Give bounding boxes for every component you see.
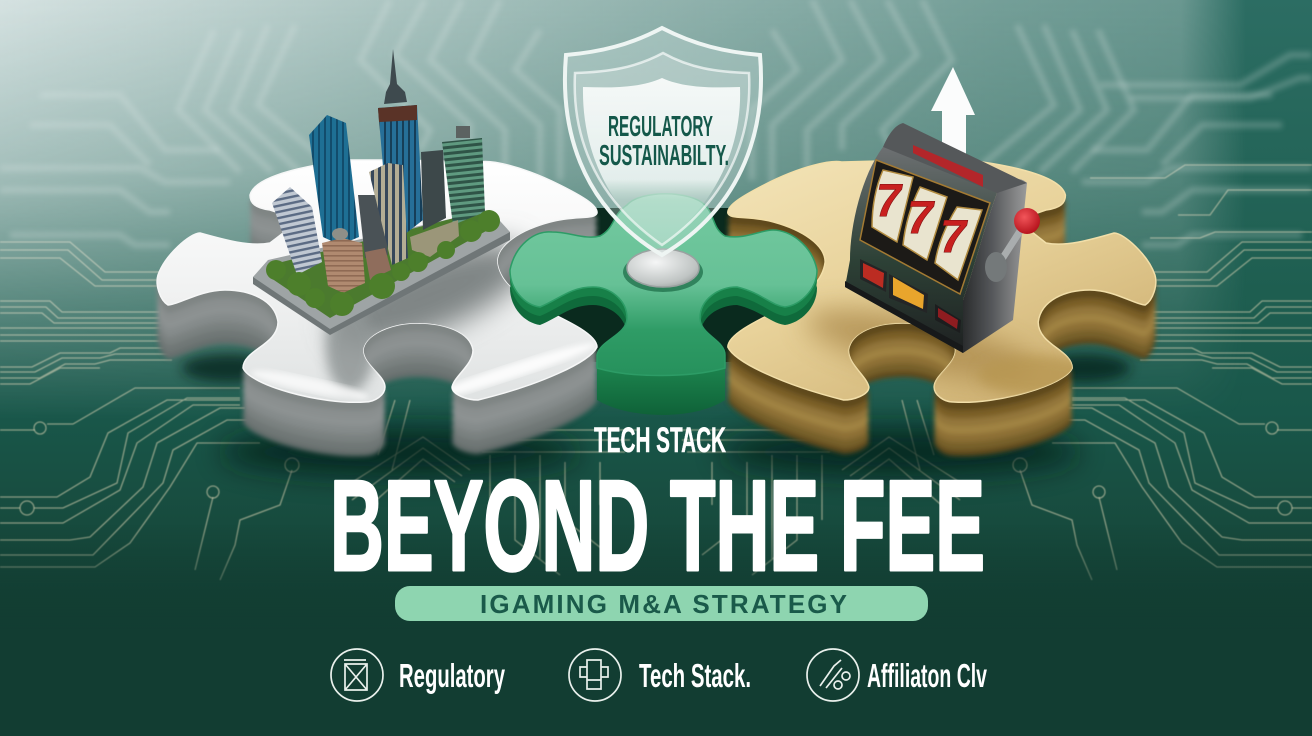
icon: growth arrow <box>931 67 975 155</box>
building: tall spire tower <box>378 49 423 238</box>
slot machine top <box>883 123 1027 206</box>
shield text line 1: REGULATORY <box>608 111 713 143</box>
city base plate <box>253 210 510 335</box>
reel 3: 7 <box>940 210 968 262</box>
reel 2 <box>903 187 947 260</box>
feature: tech stack <box>569 649 751 701</box>
subtitle pill <box>395 586 928 621</box>
puzzle piece: gold <box>728 160 1156 456</box>
dark well behind green piece <box>490 208 835 362</box>
label: regulatory: Regulatory <box>399 657 505 694</box>
feature: affiliate clv <box>807 649 987 701</box>
puzzle piece: silver <box>157 160 598 456</box>
reel 2: 7 <box>907 191 935 243</box>
reel 3 <box>935 207 982 280</box>
eyebrow: tech stack: TECH STACK <box>594 421 726 460</box>
miniature city on platform <box>253 49 510 335</box>
reel 1 <box>872 170 913 242</box>
building: rear dark <box>358 150 446 258</box>
shield text line 2: SUSTAINABILTY. <box>599 140 729 172</box>
icon: tech stack <box>569 649 621 701</box>
reel 1: 7 <box>876 174 903 226</box>
building: small brick <box>365 248 391 280</box>
glass shield: regulatory sustainability <box>565 28 761 292</box>
trees <box>266 210 500 316</box>
shield pedestal <box>623 249 703 292</box>
label: tech stack: Tech Stack. <box>639 657 751 694</box>
icon: regulatory <box>331 649 383 701</box>
slot machine base <box>845 281 963 353</box>
building: green stripe tower <box>442 126 485 225</box>
building: centre beige <box>369 163 408 265</box>
feature: regulatory <box>331 649 505 701</box>
shield glass body <box>565 28 761 255</box>
reel window <box>860 160 990 294</box>
shield inner panel <box>583 78 740 247</box>
slot lever <box>985 208 1040 282</box>
puzzle piece: green <box>510 194 817 415</box>
slot machine <box>845 123 1040 353</box>
slot display strip <box>913 145 983 187</box>
slot button lights <box>860 259 961 333</box>
label: affiliate clv: Affiliaton Clv <box>867 657 987 694</box>
shadow under puzzle pieces <box>182 354 1130 476</box>
building: blue tower <box>309 115 359 245</box>
building: low hall <box>410 220 459 257</box>
building: left grey <box>272 187 322 275</box>
icon: affiliate <box>807 649 859 701</box>
slot machine front <box>845 147 997 353</box>
building: brick <box>322 228 365 293</box>
slot machine side <box>963 179 1027 353</box>
subtitle pill: IGAMING M&A STRATEGY <box>480 589 847 619</box>
